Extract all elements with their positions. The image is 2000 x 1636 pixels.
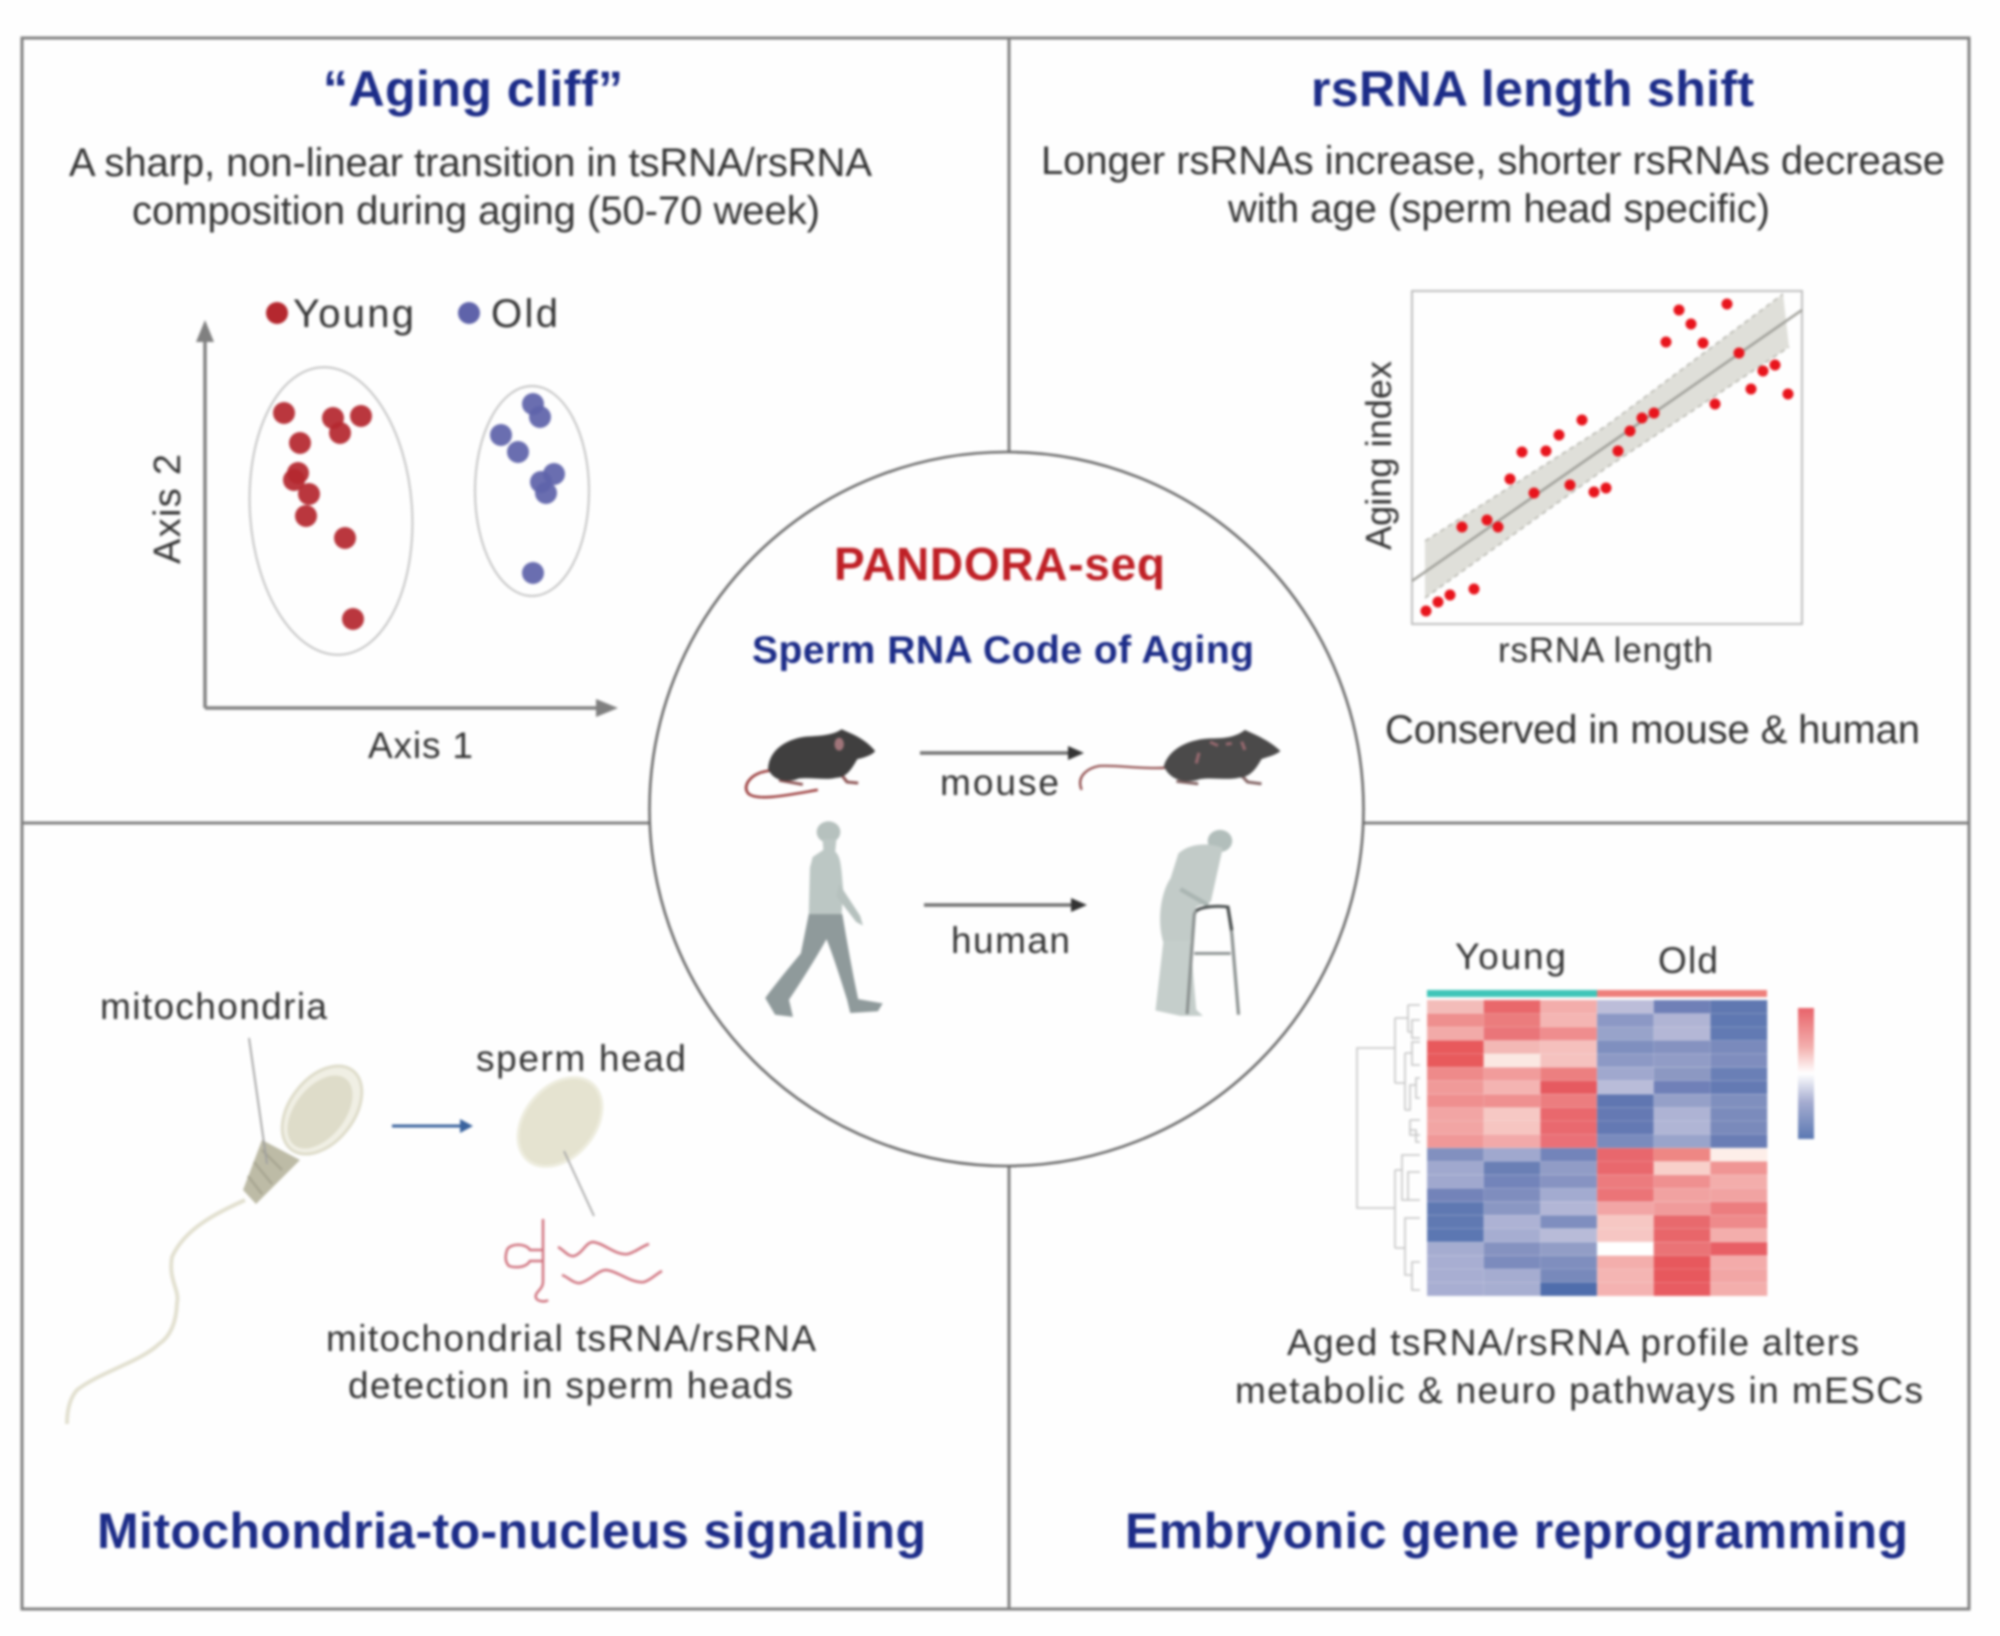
data points (1420, 298, 1794, 616)
text block: mESC effect: Aged tsRNA/rsRNA profile alters (1287, 1322, 1859, 1363)
heading: aging cliff: “Aging cliff” (323, 61, 623, 117)
heatmap cells (1427, 1000, 1767, 1296)
group annotation bar (1427, 990, 1767, 997)
colour scale bar (1798, 1008, 1814, 1139)
arrow: sperm to sperm head (392, 1119, 473, 1133)
text block: mESC effect (1235, 1322, 1923, 1411)
legend (266, 292, 558, 336)
pointer line: mitochondria (249, 1038, 267, 1164)
text block: mESC effect: metabolic & neuro pathways in mESCs (1235, 1370, 1923, 1411)
heatmap with labels, dendrogram and colour bar (1357, 936, 1814, 1296)
cluster: old (475, 386, 589, 596)
heading: mitochondria-to-nucleus signaling: Mitochondria-to-nucleus signaling (97, 1503, 926, 1559)
text block: aging cliff description: A sharp, non-linear transition in tsRNA/rsRNA (69, 141, 872, 185)
dendrogram (1357, 1005, 1420, 1290)
heading: PANDORA-seq: PANDORA-seq (834, 538, 1165, 590)
axes: Axis 2 (147, 454, 189, 564)
scatter chart: aging index vs rsRNA length (1358, 291, 1802, 670)
subheading: Sperm RNA Code of Aging: Sperm RNA Code of Aging (752, 629, 1254, 672)
icon: isolated sperm head (501, 1061, 619, 1183)
text block: conserved note: Conserved in mouse & human (1385, 708, 1920, 752)
arrow: mouse aging (920, 746, 1084, 760)
label: mouse: mouse (940, 762, 1059, 803)
regression line (1412, 310, 1802, 581)
arrow: human aging (924, 898, 1087, 912)
axes: Axis 1 (368, 725, 473, 766)
legend: Old (491, 292, 558, 336)
axes (147, 320, 618, 766)
label: sperm head: sperm head (476, 1038, 686, 1079)
x axis label: rsRNA length (1498, 631, 1713, 670)
label: mitochondria: mitochondria (100, 986, 327, 1027)
text block: detection note (326, 1318, 816, 1406)
column label: young: Young (1455, 936, 1566, 977)
pointer line: sperm head to RNA (564, 1151, 594, 1216)
panel: aging cliff (69, 61, 872, 766)
text block: rsRNA description: with age (sperm head specific) (1227, 187, 1770, 231)
column label: old: Old (1658, 940, 1718, 981)
icon: tsRNA and rsRNA molecules (506, 1219, 662, 1301)
heading: embryonic gene reprogramming: Embryonic gene reprogramming (1125, 1503, 1908, 1559)
icon: aged mouse (1080, 730, 1280, 790)
confidence band (1425, 294, 1789, 598)
cluster: young (240, 362, 422, 660)
icon: aged human with walker (1156, 830, 1239, 1016)
central circle: PANDORA-seq (650, 452, 1364, 1166)
icon: whole sperm (67, 1051, 378, 1424)
text block: rsRNA description: Longer rsRNAs increase, shorter rsRNAs decrease (1041, 139, 1945, 183)
text block: aging cliff description: composition during aging (50-70 week) (132, 189, 820, 233)
label: human: human (951, 920, 1070, 961)
panel: rsRNA length shift (1041, 61, 1945, 752)
y axis label: Aging index (1358, 361, 1399, 550)
text block: rsRNA description (1041, 139, 1945, 231)
icon: young mouse (746, 729, 875, 797)
text block: detection note: mitochondrial tsRNA/rsRNA (326, 1318, 816, 1359)
text block: detection note: detection in sperm heads (348, 1365, 793, 1406)
panel: mitochondria-to-nucleus signaling (67, 986, 926, 1559)
text block: aging cliff description (69, 141, 872, 233)
scatter plot: young vs old clusters (147, 292, 618, 766)
panel: embryonic gene reprogramming (1125, 936, 1923, 1559)
icon: young walking human (765, 821, 883, 1017)
legend: Young (293, 292, 414, 336)
heading: rsRNA length shift: rsRNA length shift (1311, 61, 1754, 117)
